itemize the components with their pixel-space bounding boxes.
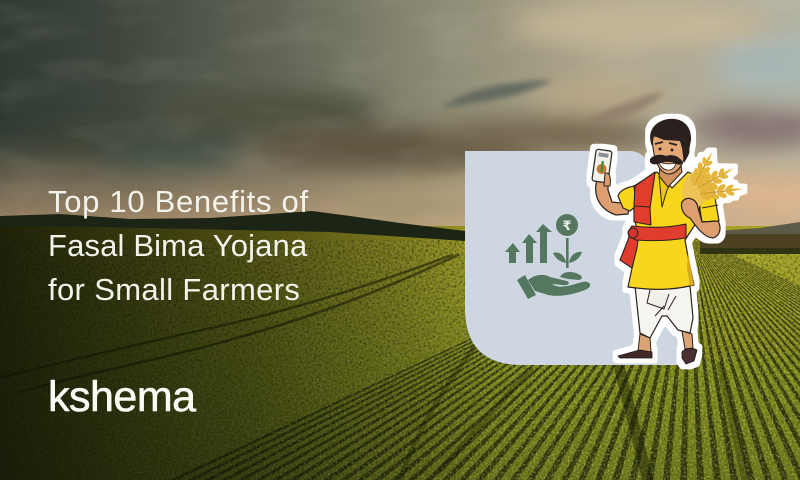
eyes and brows	[655, 142, 677, 145]
hair	[650, 119, 691, 163]
shadowed furrows	[0, 255, 745, 480]
logo: kshema: kshema	[48, 373, 196, 421]
ear	[683, 146, 689, 156]
left arm	[596, 172, 630, 215]
right sleeve	[698, 180, 719, 222]
wheat bundle	[682, 148, 744, 208]
mustache	[650, 155, 682, 165]
fingers on phone	[604, 173, 610, 186]
crop rows fan	[170, 235, 800, 480]
waist sash with knot	[620, 224, 686, 268]
title: for Small Farmers	[48, 272, 300, 307]
dhoti	[635, 286, 693, 338]
right shoe	[682, 349, 697, 364]
shins	[638, 334, 651, 352]
phone	[592, 149, 612, 183]
title	[48, 184, 309, 307]
collar and placket	[659, 176, 670, 207]
smile	[659, 162, 676, 170]
neck	[659, 158, 682, 187]
shoulder cloth	[634, 172, 655, 225]
title: Fasal Bima Yojana	[48, 228, 307, 263]
left shoe	[618, 350, 652, 358]
face	[652, 136, 686, 174]
kurta body	[628, 172, 703, 289]
title: Top 10 Benefits of	[48, 184, 309, 219]
icon: growth arrows, rupee plant and hand: ₹	[562, 218, 572, 233]
left sleeve	[618, 186, 636, 211]
right arm and fist	[681, 198, 720, 238]
